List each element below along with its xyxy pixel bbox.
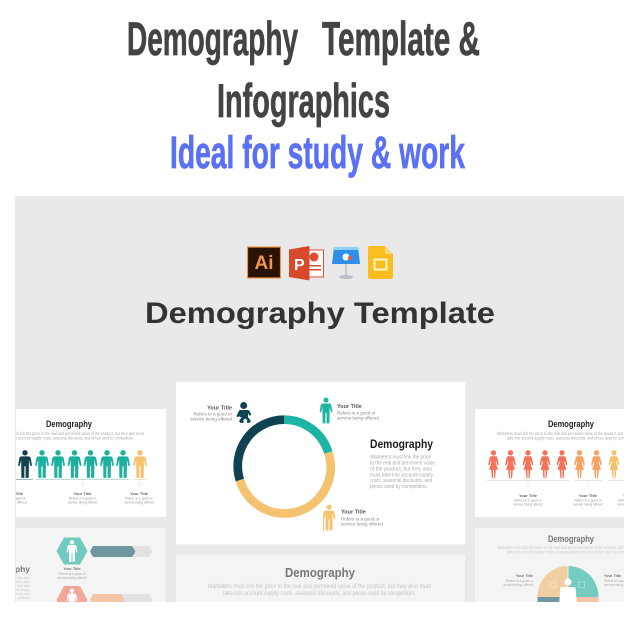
title: Demography Template & Infographics: Template & bbox=[322, 12, 480, 65]
text block: central slide description bbox=[370, 454, 435, 490]
label: baby segment: Your Title bbox=[207, 406, 232, 412]
text block: bottom-centre description bbox=[208, 584, 431, 597]
labels: bottom-right slide: Your Title bbox=[604, 574, 621, 578]
bar: second progress bar bbox=[90, 594, 152, 602]
text block: central slide description: of the product, but they also bbox=[370, 466, 432, 472]
heading: right slide: Demography bbox=[548, 419, 594, 429]
labels: left slide: service being offered bbox=[124, 500, 154, 504]
text block: clipped heading and description: counts, and bbox=[13, 592, 30, 596]
labels: first hexagon bbox=[57, 567, 87, 580]
icon row: software logos bbox=[248, 246, 393, 280]
text block: left slide description: take into account supply costs, seasonal discounts, and prices used by competitors. bbox=[4, 436, 134, 440]
heading: Demography Template: Demography Template bbox=[145, 297, 495, 330]
labels: bottom-right slide: Refers to a good or bbox=[506, 579, 534, 583]
chart: row of people bbox=[16, 450, 147, 487]
text block: central slide description: prices used by competitors. bbox=[370, 484, 428, 490]
labels: right slide bbox=[513, 494, 624, 506]
labels: bottom-right slide bbox=[504, 574, 624, 587]
text block: clipped heading and description: count supply bbox=[11, 588, 30, 592]
label: elderly segment: service being offered bbox=[341, 522, 383, 526]
labels: left slide: Refers to a good or bbox=[69, 496, 97, 500]
icon: adult person bbox=[320, 398, 332, 423]
text block: central slide description: must take into account supply bbox=[370, 472, 433, 478]
text block: right slide description bbox=[497, 432, 624, 440]
bar: first progress bar bbox=[90, 546, 152, 557]
chart: semicircle with person bbox=[538, 566, 598, 603]
label: elderly segment: Refers to a good or bbox=[341, 516, 380, 522]
heading: bottom-centre slide: Demography bbox=[285, 565, 356, 580]
panel: bottom-left slide with hexagons bbox=[16, 528, 166, 602]
chart: row of women bbox=[487, 450, 624, 488]
labels: bottom-right slide: service being offered bbox=[503, 583, 533, 587]
labels: bottom-right slide: Refers to a good or bbox=[604, 579, 632, 583]
labels: right slide: Refers to a good or bbox=[574, 498, 603, 502]
label: baby segment: service being offered bbox=[190, 416, 232, 422]
text block: bottom-centre description: take into account supply costs, seasonal discounts, and prices used by competitors. bbox=[223, 591, 416, 597]
labels: left slide: service being offered bbox=[68, 500, 97, 504]
chart: donut ring bbox=[238, 420, 331, 513]
label: adult segment: Your Title bbox=[337, 404, 362, 410]
labels: first hexagon: service being offered bbox=[57, 576, 87, 580]
labels: left slide: Your Title bbox=[130, 491, 149, 496]
labels: left slide: Your Title bbox=[5, 491, 24, 496]
heading: bottom-right slide: Demography bbox=[548, 534, 594, 544]
subtitle: Ideal for study & work: Ideal for study & work bbox=[170, 127, 466, 178]
labels: left slide bbox=[16, 492, 154, 504]
panel: central slide with donut chart bbox=[176, 382, 465, 544]
icon: baby bbox=[236, 402, 251, 423]
text block: bottom-centre description: Marketers must link the price to the real and perceived value of the product, but they also must bbox=[208, 584, 431, 590]
labels: right slide: Your Title bbox=[519, 493, 538, 498]
icon: teal hexagon with person bbox=[56, 538, 88, 564]
label: adult segment: Refers to a good or bbox=[337, 410, 376, 416]
label: baby segment bbox=[190, 406, 232, 422]
icon: PowerPoint: P bbox=[294, 257, 305, 274]
panel: grey showcase background bbox=[15, 196, 624, 602]
labels: bottom-right slide: Your Title bbox=[516, 574, 533, 578]
panel: left slide with people row bbox=[0, 409, 166, 517]
labels: right slide: service being offered bbox=[513, 502, 543, 506]
label: elderly segment bbox=[341, 510, 383, 526]
panel: bottom-right slide with semicircle chart bbox=[475, 528, 624, 602]
labels: left slide: Your Title bbox=[73, 491, 92, 496]
icon: Adobe Illustrator bbox=[248, 247, 280, 278]
text block: left slide description bbox=[16, 432, 144, 440]
panel: right slide with women row bbox=[475, 409, 640, 517]
text block: central slide description: costs, seasonal discounts, and bbox=[370, 478, 432, 484]
icon: Adobe Illustrator: Ai bbox=[254, 253, 274, 274]
title: Demography Template & Infographics: Demography bbox=[127, 12, 298, 65]
text block: clipped heading and description: petitors. bbox=[18, 596, 30, 600]
text block: central slide description: to the real and perceived value bbox=[370, 460, 435, 466]
labels: right slide: Refers to a good or bbox=[514, 498, 543, 502]
labels: right slide: Your Title bbox=[579, 493, 598, 498]
icon: elderly person bbox=[323, 505, 336, 531]
icon: Keynote bbox=[332, 247, 360, 279]
title: Demography Template & Infographics bbox=[127, 12, 480, 127]
text block: clipped heading and description: t they also bbox=[15, 584, 30, 588]
labels: first hexagon: Refers to a good or bbox=[58, 572, 87, 576]
labels: left slide: Refers to a good or bbox=[125, 496, 154, 500]
label: elderly segment: Your Title bbox=[341, 510, 366, 516]
icon: Google Slides bbox=[368, 246, 393, 279]
title: Demography Template & Infographics: Infographics bbox=[217, 74, 390, 127]
labels: first hexagon: Your Title bbox=[63, 567, 81, 571]
labels: bottom-right slide: service being offered bbox=[604, 583, 634, 587]
label: adult segment: service being offered bbox=[337, 416, 379, 420]
panel: bottom-centre slide bbox=[176, 555, 465, 602]
label: baby segment: Refers to a good or bbox=[193, 412, 232, 416]
text block: central slide description: Marketers must link the price bbox=[370, 454, 431, 460]
label: adult segment bbox=[337, 404, 379, 420]
icon: pink hexagon with person bbox=[56, 586, 88, 602]
text block: clipped heading and description bbox=[16, 566, 30, 600]
text block: bottom-right description bbox=[497, 546, 624, 554]
text block: clipped heading and description: they also bbox=[17, 576, 30, 580]
heading: central slide: Demography bbox=[370, 437, 433, 451]
icon: PowerPoint bbox=[289, 246, 324, 280]
labels: right slide: service being offered bbox=[573, 502, 603, 506]
heading: left slide: Demography bbox=[46, 419, 92, 429]
text block: clipped heading and description: erceived value bbox=[9, 580, 30, 584]
